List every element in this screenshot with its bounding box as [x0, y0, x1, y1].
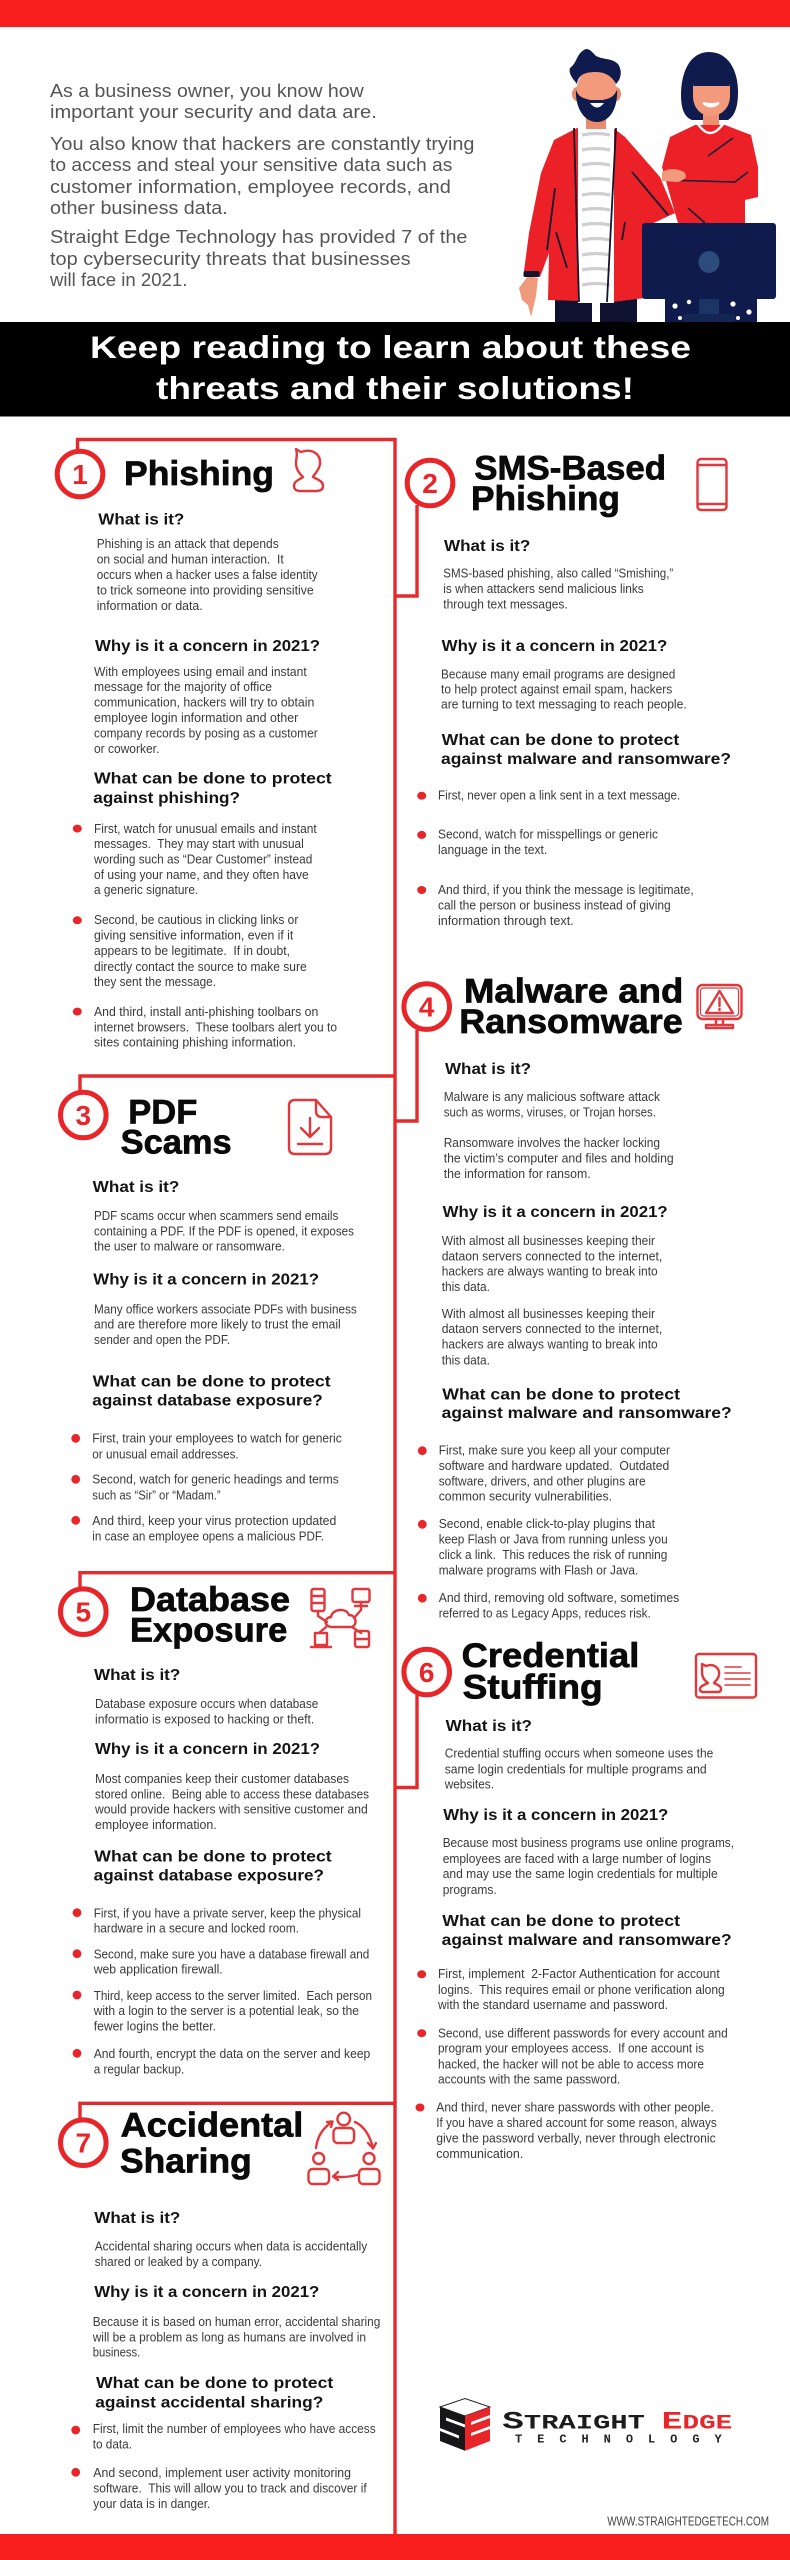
text: definition: shared or leaked by a company. [95, 2254, 262, 2269]
bullet list: click a link. This reduces the risk of running [439, 1547, 667, 1562]
heading: protect: against database exposure? [94, 1868, 324, 1885]
bullet list: or unusual email addresses. [92, 1446, 239, 1461]
bullet list: communication. [436, 2146, 523, 2161]
text: concern: company records by posing as a customer [94, 726, 318, 741]
bullet list: web application firewall. [93, 1962, 223, 1977]
bullet list: Second, be cautious in clicking links or [94, 912, 299, 927]
heading: protect: against phishing? [93, 790, 240, 807]
icon: database network [311, 1589, 370, 1647]
bullet list: First, make sure you keep all your computer [439, 1443, 671, 1458]
text: concern: sender and open the PDF. [94, 1332, 230, 1347]
bullet list: First, if you have a private server, keep the physical [94, 1905, 361, 1920]
heading: protect: against database exposure? [92, 1393, 323, 1410]
text: concern [441, 666, 687, 712]
text: definition [95, 1696, 318, 1726]
bullet list: software and hardware updated. Outdated [439, 1458, 669, 1473]
bullet list [73, 1905, 372, 2077]
title [471, 450, 666, 518]
heading: protect [95, 2375, 333, 2411]
bullet list: common security vulnerabilities. [439, 1489, 612, 1504]
text: definition [443, 566, 673, 612]
number badge 1: 1 [72, 459, 88, 490]
bullet list: If you have a shared account for some reason, always [436, 2115, 717, 2130]
bullet list: And third, if you think the message is legitimate, [438, 882, 694, 897]
bullet list: to data. [93, 2436, 132, 2451]
bullet list: malware programs with Flash or Java. [439, 1563, 638, 1578]
logo cube [440, 2398, 490, 2451]
bullet list [417, 788, 694, 928]
bullet list: And third, install anti-phishing toolbars on [94, 1004, 318, 1019]
bullet list: And third, never share passwords with other people. [436, 2100, 714, 2115]
text: definition: Phishing is an attack that depends [97, 536, 279, 551]
text: definition: the victim’s computer and files and holding [444, 1150, 674, 1166]
bullet list: program your employees access. If one account is [438, 2041, 704, 2056]
text: concern: hackers are always wanting to break into [442, 1264, 658, 1279]
text: concern: message for the majority of office [94, 679, 272, 694]
title: Phishing [124, 455, 274, 493]
number badge 5: 5 [76, 1597, 91, 1628]
bullet list: And third, removing old software, sometimes [439, 1590, 679, 1605]
heading: what is it: What is it? [94, 1667, 180, 1684]
title: PDF [128, 1093, 197, 1131]
intro text: other business data. [50, 198, 228, 218]
number badge 6: 6 [419, 1657, 434, 1688]
text: definition: informatio is exposed to hacking or theft. [95, 1711, 314, 1726]
text: concern: Because it is based on human error, accidental sharing [93, 2314, 380, 2329]
icon: id card [696, 1654, 756, 1698]
bullet list: such as “Sir” or “Madam.” [92, 1487, 221, 1502]
logo wordmark: E DGE [662, 2407, 732, 2436]
text: definition: Accidental sharing occurs when data is accidentally [95, 2239, 368, 2254]
text: concern [94, 1301, 357, 1347]
panel: 7 Accidental Sharing [61, 2107, 380, 2511]
number badge 2: 2 [422, 468, 438, 499]
text: definition: websites. [444, 1777, 494, 1792]
bullet list [71, 1431, 342, 1544]
text: concern [443, 1835, 734, 1897]
bullet list: they sent the message. [94, 974, 216, 989]
bullet list: Second, watch for generic headings and terms [92, 1472, 339, 1487]
bullet list: directly contact the source to make sure [94, 959, 307, 974]
text: definition: Malware is any malicious software attack [444, 1089, 661, 1104]
bullet list: hardware in a secure and locked room. [94, 1921, 299, 1936]
number badge 6 [404, 1649, 450, 1695]
number badge 3 [61, 1092, 106, 1138]
title: SMS-Based [474, 450, 666, 488]
heading: protect [441, 732, 731, 768]
panel: 4 Malware and Ransomware [404, 972, 742, 1620]
number badge 4 [404, 984, 450, 1029]
heading: protect: against malware and ransomware? [442, 1405, 732, 1422]
hand on woman's arm [662, 169, 686, 182]
text: definition [444, 1089, 674, 1181]
text: concern: stored online. Being able to access these databases [95, 1786, 369, 1801]
text: concern [94, 1771, 369, 1832]
text: concern: Many office workers associate PDFs with business [94, 1301, 357, 1316]
text: definition: Credential stuffing occurs when someone uses the [445, 1746, 713, 1761]
heading: protect: What can be done to protect [442, 1386, 680, 1403]
woman [662, 52, 758, 322]
bullet list: Second, make sure you have a database firewall and [94, 1946, 369, 1961]
text: concern: With almost all businesses keeping their [442, 1306, 656, 1321]
number badge 1 [57, 451, 103, 497]
bullet list [73, 821, 337, 1050]
bullet list: First, watch for unusual emails and instant [94, 821, 317, 836]
heading: what is it: What is it? [98, 512, 184, 529]
title: Accidental [121, 2107, 303, 2145]
text: definition [97, 536, 318, 613]
text: definition: Database exposure occurs when database [95, 1696, 318, 1711]
panel: 6 Credential Stuffing [404, 1637, 756, 2161]
intro text [49, 81, 474, 290]
text: concern: and are therefore more likely to trust the email [94, 1317, 341, 1332]
title [459, 972, 683, 1041]
bullet list: language in the text. [438, 842, 547, 857]
intro text: important your security and data are. [50, 102, 377, 122]
text: definition: information or data. [97, 598, 203, 613]
logo: Straight Edge Technology [440, 2398, 732, 2451]
title: Credential [462, 1637, 639, 1675]
bullet list: First, never open a link sent in a text message. [438, 788, 680, 802]
bullet list: software. This will allow you to track and discover if [93, 2480, 367, 2495]
icon: phone [698, 459, 726, 510]
text: concern: employee information. [95, 1817, 217, 1832]
bullet list: And second, implement user activity monitoring [93, 2465, 351, 2480]
banner heading [90, 329, 691, 406]
bullet list: keep Flash or Java from running unless you [439, 1532, 668, 1547]
number badge 5 [61, 1589, 106, 1634]
number badge 7: 7 [76, 2128, 91, 2159]
number badge 7 [61, 2120, 106, 2166]
text: definition [94, 1208, 354, 1254]
man [519, 49, 686, 322]
title: Phishing [471, 480, 620, 518]
text: concern: employee login information and other [94, 710, 299, 725]
bullet list [416, 1966, 728, 2161]
text: concern: dataon servers connected to the internet, [442, 1248, 662, 1263]
bullet list: a generic signature. [94, 882, 198, 897]
bullet list: information through text. [438, 913, 574, 928]
text: concern: With employees using email and instant [94, 664, 307, 679]
bullet list: your data is in danger. [93, 2496, 210, 2511]
text: definition: occurs when a hacker uses a false identity [97, 567, 318, 582]
heading: protect [93, 770, 332, 807]
text: definition: through text messages. [443, 596, 568, 612]
title: Sharing [120, 2142, 252, 2180]
illustration: man and woman with monitor [519, 49, 776, 322]
banner heading: Keep reading to learn about these [90, 329, 691, 365]
text: concern: business. [93, 2345, 140, 2360]
bullet list: And third, keep your virus protection updated [92, 1513, 336, 1528]
text: definition: SMS-based phishing, also called “Smishing,” [443, 566, 673, 581]
icon: pdf download [289, 1100, 331, 1154]
text: concern: or coworker. [94, 741, 159, 756]
icon: person [294, 449, 323, 491]
bullet list: in case an employee opens a malicious PDF. [92, 1529, 324, 1544]
bullet list: hacked, the hacker will not be able to access more [438, 2056, 704, 2071]
bullet list: giving sensitive information, even if it [94, 928, 294, 943]
intro text: to access and steal your sensitive data such as [50, 155, 452, 175]
text: concern: to help protect against email spam, hackers [441, 682, 672, 696]
text: concern: hackers are always wanting to break into [442, 1337, 658, 1352]
bullet list: sites containing phishing information. [94, 1035, 296, 1050]
bullet list: wording such as “Dear Customer” instead [93, 852, 312, 866]
bullet list: logins. This requires email or phone verification along [438, 1982, 725, 1997]
bullet list: with a login to the server is a potential leak, so the [93, 2003, 359, 2018]
bullet list: First, implement 2-Factor Authentication for account [438, 1966, 720, 1981]
heading: why: Why is it a concern in 2021? [443, 1807, 668, 1824]
text: concern: would provide hackers with sensitive customer and [94, 1802, 368, 1817]
title: Scams [121, 1123, 232, 1161]
text: concern: employees are faced with a large number of logins [443, 1851, 711, 1866]
text: definition: PDF scams occur when scammers send emails [94, 1208, 338, 1223]
intro text: top cybersecurity threats that businesses [50, 249, 411, 269]
text: concern: communication, hackers will try to obtain [94, 694, 314, 710]
bullet list: internet browsers. These toolbars alert you to [94, 1019, 337, 1034]
top red bar [0, 0, 790, 27]
panel: 1 Phishing [57, 449, 337, 1050]
heading: protect: against malware and ransomware? [442, 1932, 732, 1949]
title [121, 1093, 232, 1161]
heading: what is it: What is it? [446, 1718, 532, 1735]
heading: protect [92, 1374, 331, 1410]
heading: why: Why is it a concern in 2021? [95, 1741, 320, 1758]
bottom red bar [0, 2534, 790, 2560]
title [120, 2107, 303, 2180]
bullet list: call the person or business instead of giving [438, 897, 671, 912]
heading: protect: What can be done to protect [96, 2375, 333, 2392]
monitor [642, 223, 776, 322]
intro text: customer information, employee records, and [50, 177, 451, 197]
bullet list: accounts with the same password. [438, 2072, 620, 2087]
heading: why: Why is it a concern in 2021? [442, 638, 667, 655]
heading: protect [94, 1848, 332, 1885]
bullet list [71, 2421, 376, 2511]
text: concern: this data. [442, 1352, 490, 1367]
panel: 5 Database Exposure [61, 1581, 372, 2077]
text: definition: such as worms, viruses, or Trojan horses. [444, 1104, 656, 1119]
heading: protect: What can be done to protect [94, 770, 332, 788]
logo wordmark: TECHNOLOGY [515, 2433, 722, 2447]
text: definition: is when attackers send malicious links [443, 581, 644, 596]
title: Database [130, 1581, 290, 1619]
icon: sharing people [308, 2113, 380, 2184]
bullet list: fewer logins the better. [94, 2018, 216, 2033]
heading: why: Why is it a concern in 2021? [95, 638, 320, 655]
heading: protect: What can be done to protect [442, 732, 679, 749]
number badge 4: 4 [419, 992, 435, 1023]
icon: monitor alert [698, 985, 742, 1028]
bullet list: of using your name, and they often have [94, 867, 309, 882]
panel: 3 PDF Scams [61, 1092, 357, 1544]
black banner [0, 322, 790, 416]
heading: protect: What can be done to protect [94, 1848, 332, 1865]
bullet list: referred to as Legacy Apps, reduces risk. [439, 1606, 651, 1620]
intro text: As a business owner, you know how [50, 81, 365, 101]
text: concern [94, 664, 318, 756]
title: Exposure [130, 1612, 287, 1650]
text: concern: programs. [443, 1882, 497, 1897]
heading: protect: against accidental sharing? [95, 2394, 323, 2411]
heading: protect: What can be done to protect [442, 1913, 680, 1930]
text: definition: containing a PDF. If the PDF is opened, it exposes [94, 1223, 354, 1238]
heading: protect: What can be done to protect [93, 1374, 331, 1391]
intro text: Straight Edge Technology has provided 7 of the [50, 227, 468, 247]
text: definition: Ransomware involves the hacker locking [444, 1135, 660, 1150]
title [130, 1581, 290, 1650]
bullet list: First, limit the number of employees who have access [93, 2421, 376, 2436]
text: definition: same login credentials for multiple programs and [445, 1761, 707, 1776]
bullet list: Second, enable click-to-play plugins that [439, 1516, 655, 1531]
title: Ransomware [459, 1003, 683, 1041]
woman's polka-dot trousers [665, 297, 757, 322]
bullet list: messages. They may start with unusual [94, 836, 304, 851]
bullet list: give the password verbally, never through electronic [436, 2131, 716, 2146]
text: definition: to trick someone into providing sensitive [97, 582, 314, 598]
bullet list: And fourth, encrypt the data on the server and keep [94, 2046, 370, 2061]
text: definition: on social and human interaction. It [97, 552, 284, 566]
bullet list: with the standard username and password. [437, 1997, 668, 2012]
text: concern: Because most business programs use online programs, [443, 1835, 734, 1850]
text: concern: With almost all businesses keeping their [442, 1233, 656, 1248]
text: concern: this data. [442, 1279, 490, 1294]
text: definition: the information for ransom. [444, 1166, 591, 1181]
heading: what is it: What is it? [94, 2210, 180, 2227]
text: definition [95, 2239, 368, 2269]
heading: protect [442, 1913, 732, 1949]
number badge 2 [407, 460, 453, 506]
heading: why: Why is it a concern in 2021? [94, 2284, 319, 2301]
text: concern: Because many email programs are designed [441, 666, 675, 681]
text: concern: and may use the same login credentials for multiple [443, 1866, 718, 1881]
bullet list: First, train your employees to watch for generic [92, 1431, 342, 1446]
panel: 2 SMS-Based Phishing [407, 450, 731, 928]
heading: why: Why is it a concern in 2021? [443, 1204, 668, 1221]
text: concern: will be a problem as long as humans are involved in [92, 2329, 366, 2344]
intro text: will face in 2021. [49, 270, 187, 290]
intro text: You also know that hackers are constantly trying [50, 134, 474, 154]
bullet list: Third, keep access to the server limited. Each person [94, 1988, 372, 2003]
heading: why: Why is it a concern in 2021? [93, 1271, 319, 1288]
title: Malware and [464, 972, 683, 1010]
title: Stuffing [463, 1669, 603, 1707]
bullet list [418, 1443, 679, 1620]
bullet list: appears to be legitimate. If in doubt, [94, 943, 290, 958]
text: definition [444, 1746, 713, 1792]
text: concern: Most companies keep their customer databases [95, 1771, 349, 1786]
heading: protect: against malware and ransomware? [441, 751, 731, 768]
text: concern [442, 1233, 662, 1367]
bullet list: software, drivers, and other plugins are [439, 1473, 646, 1488]
text: concern: dataon servers connected to the internet, [442, 1321, 662, 1336]
connector lines timeline [78, 440, 417, 2534]
number badge 3: 3 [76, 1100, 91, 1131]
text: concern: are turning to text messaging to reach people. [441, 697, 687, 712]
heading: what is it: What is it? [444, 538, 530, 555]
banner heading: threats and their solutions! [156, 370, 634, 406]
bullet list: Second, use different passwords for every account and [438, 2025, 728, 2040]
text: concern [92, 2314, 380, 2360]
bullet list: a regular backup. [94, 2062, 184, 2077]
text: definition: the user to malware or ransomware. [94, 1239, 285, 1254]
heading: protect [442, 1386, 732, 1422]
bullet list: Second, watch for misspellings or generic [438, 827, 659, 842]
logo wordmark: S TRAIGHT [502, 2407, 645, 2436]
heading: what is it: What is it? [93, 1179, 179, 1196]
title [462, 1637, 639, 1707]
heading: what is it: What is it? [445, 1061, 531, 1078]
logo wordmark [502, 2407, 732, 2447]
